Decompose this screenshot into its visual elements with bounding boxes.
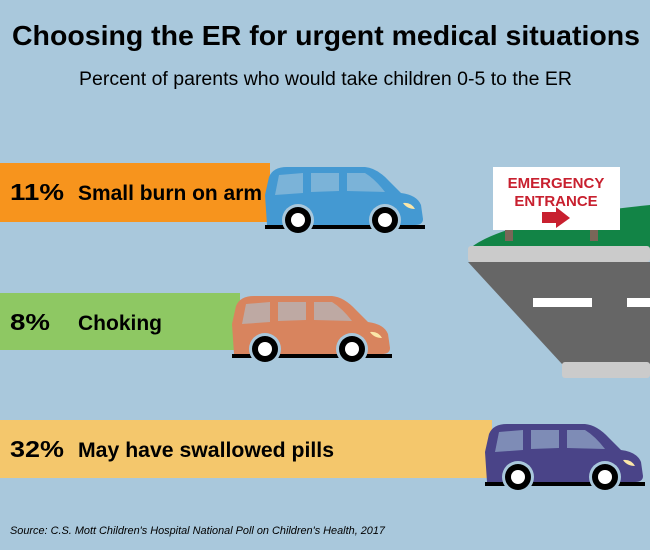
car: blue [265, 167, 425, 236]
bar: choking: Choking [78, 312, 162, 335]
source: Source: C.S. Mott Children's Hospital National Poll on Children's Health, 2017 [10, 525, 386, 537]
bar: pills: May have swallowed pills [78, 439, 334, 462]
car: orange [232, 296, 392, 365]
bar: pills: 32% [10, 436, 64, 462]
road [468, 246, 650, 262]
bar: small burn: Small burn on arm [78, 182, 262, 205]
bar: choking: 8% [10, 309, 50, 335]
bar: pills [0, 420, 492, 478]
subtitle: Percent of parents who would take children 0-5 to the ER [79, 69, 572, 90]
car: purple [485, 424, 645, 493]
bar: choking [0, 293, 240, 350]
ER scene [468, 167, 650, 378]
sign [493, 167, 620, 241]
title: Choosing the ER for urgent medical situations [12, 20, 640, 51]
sign: ENTRANCE [514, 193, 598, 210]
bar: small burn: 11% [10, 179, 64, 205]
hill [468, 205, 650, 250]
bar: small burn [0, 163, 270, 222]
sign: EMERGENCY [508, 175, 604, 192]
